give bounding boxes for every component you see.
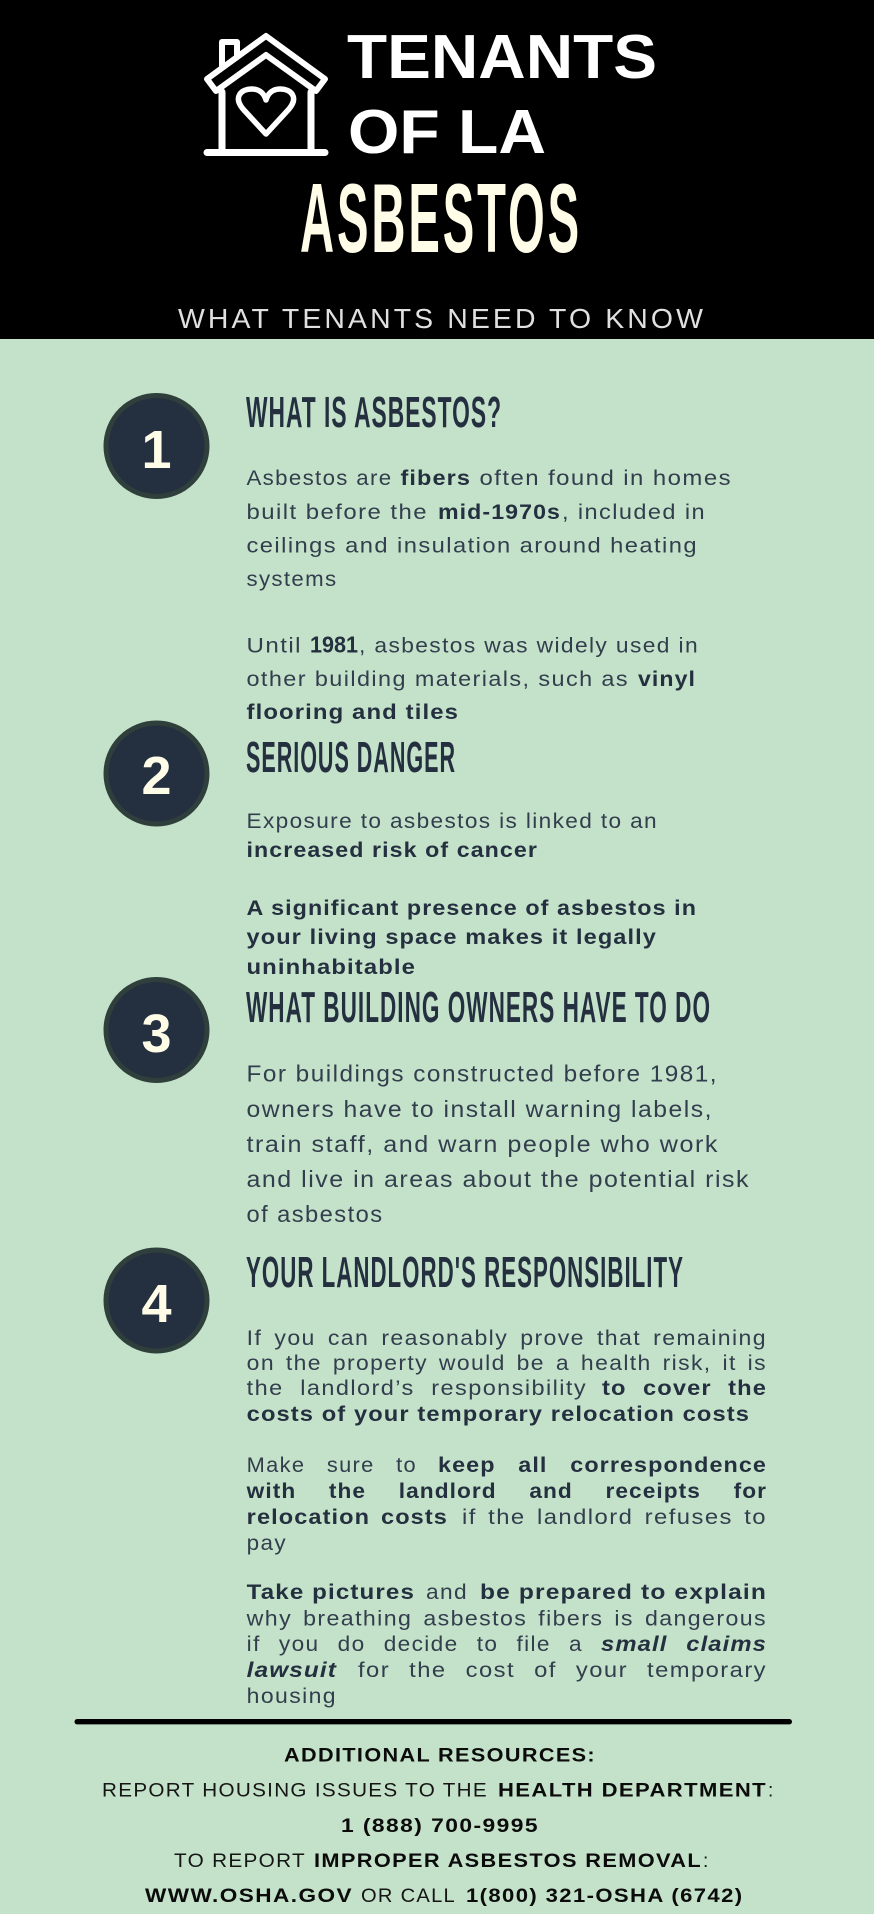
OSHA contact line: 1(800) 321-OSHA (6742): [466, 1886, 744, 1907]
asbestos removal line: IMPROPER ASBESTOS REMOVAL: [314, 1851, 702, 1872]
text block: section 2 body: uninhabitable: [246, 955, 416, 979]
text block: section 4 body: pay: [247, 1531, 287, 1555]
text block: section 4 body: if the landlord refuses to: [462, 1505, 767, 1529]
text block: section 4 body: lawsuit: [247, 1658, 337, 1682]
asbestos removal line: :: [703, 1851, 709, 1872]
text block: section 1 body: , included in: [562, 500, 706, 524]
text block: section 4 body: small claims: [601, 1632, 767, 1656]
logo text: Tenants of LA: [347, 23, 657, 167]
text block: section 1 body: vinyl: [638, 667, 696, 691]
text block: section 2 body: A significant presence of asbestos in: [246, 896, 697, 920]
panel: section 2 serious danger: SERIOUS DANGER: [246, 733, 456, 782]
text block: section 1 body: flooring and tiles: [246, 700, 459, 724]
text block: section 4 body: If you can reasonably prove that remaining: [247, 1326, 767, 1350]
panel: black header: [0, 0, 874, 339]
panel: section 1 what is asbestos: [106, 388, 732, 724]
text block: section 3 body: For buildings constructed before 1981,: [246, 1061, 718, 1087]
OSHA contact line: WWW.OSHA.GOV: [145, 1886, 353, 1907]
text block: section 4 body: be prepared to explain: [480, 1580, 767, 1604]
text block: section 3 body: of asbestos: [246, 1201, 384, 1227]
text block: section 1 body: fibers: [400, 466, 471, 490]
text block: section 3 body: [246, 1061, 750, 1227]
number badge 4: [106, 1250, 207, 1351]
OSHA contact line: [145, 1886, 744, 1907]
number badge 1: [106, 396, 207, 496]
panel: section 4 your landlord's responsibility: [106, 1248, 767, 1708]
number badge 2: 2: [141, 746, 172, 806]
text block: section 4 body: costs of your temporary relocation costs: [247, 1402, 750, 1426]
asbestos removal line: TO REPORT: [174, 1851, 306, 1872]
text block: section 4 body: keep all correspondence: [438, 1453, 767, 1477]
logo text: Tenants of LA: OF LA: [348, 98, 546, 167]
text block: section 4 body: the landlord’s responsibility: [247, 1376, 587, 1400]
text block: section 1 body: Until: [246, 634, 302, 658]
text block: section 3 body: owners have to install warning labels,: [246, 1096, 713, 1122]
number badge 1: 1: [141, 420, 172, 480]
panel: black header: ASBESTOS: [300, 163, 582, 273]
panel: section 2 serious danger: [106, 723, 697, 979]
text block: section 1 body: Asbestos are: [246, 466, 392, 490]
number badge 3: 3: [141, 1004, 172, 1064]
text block: section 4 body: if you do decide to file a: [247, 1632, 583, 1656]
icon: house with heart: [207, 36, 325, 152]
health department line: :: [768, 1781, 774, 1802]
health department phone: 1 (888) 700-9995: [341, 1816, 539, 1837]
footer heading: ADDITIONAL RESOURCES:: [284, 1746, 596, 1767]
asbestos removal line: [174, 1851, 709, 1872]
text block: section 4 body: Take pictures: [247, 1580, 415, 1604]
text block: section 1 body: other building materials, such as: [246, 667, 629, 691]
logo text: Tenants of LA: TENANTS: [347, 23, 657, 92]
text block: section 4 body: for the cost of your temporary: [358, 1658, 767, 1682]
text block: section 1 body: mid-1970s: [438, 500, 561, 524]
number badge 2: [106, 723, 207, 824]
health department line: [102, 1781, 774, 1802]
text block: section 1 body: ceilings and insulation around heating: [246, 534, 698, 558]
subtitle: WHAT TENANTS NEED TO KNOW: [178, 303, 706, 334]
text block: section 1 body: systems: [246, 567, 338, 591]
text block: section 4 body: relocation costs: [247, 1505, 448, 1529]
text block: section 4 body: Make sure to: [247, 1453, 417, 1477]
health department line: REPORT HOUSING ISSUES TO THE: [102, 1781, 488, 1802]
heading: what is asbestos: WHAT IS ASBESTOS?: [246, 388, 502, 437]
text block: section 4 body: [246, 1326, 767, 1708]
text block: section 2 body: increased risk of cancer: [246, 838, 538, 862]
text block: section 2 body: [246, 809, 697, 979]
panel: section 3 what building owners have to do: [106, 980, 750, 1227]
text block: section 1 body: often found in homes: [480, 466, 732, 490]
text block: section 3 body: and live in areas about the potential risk: [246, 1166, 750, 1192]
text block: section 4 body: and: [426, 1580, 468, 1604]
text block: section 4 body: with the landlord and receipts for: [246, 1479, 767, 1503]
text block: section 4 body: to cover the: [602, 1376, 767, 1400]
panel: additional resources footer: [102, 1746, 774, 1907]
text block: section 1 body: built before the: [246, 500, 428, 524]
number badge 4: 4: [141, 1274, 172, 1334]
number badge 3: [106, 980, 207, 1080]
text block: section 1 body: [246, 466, 732, 724]
text block: section 2 body: Exposure to asbestos is linked to an: [246, 809, 658, 833]
text block: section 3 body: train staff, and warn people who work: [246, 1131, 719, 1157]
OSHA contact line: OR CALL: [361, 1886, 456, 1907]
text block: section 1 body: , asbestos was widely used in: [359, 634, 699, 658]
text block: section 1 body: 1981: [310, 632, 358, 658]
text block: section 4 body: housing: [247, 1684, 337, 1708]
text block: section 4 body: on the property would be a health risk, it is: [247, 1351, 767, 1375]
text block: section 4 body: why breathing asbestos fibers is dangerous: [246, 1607, 767, 1631]
text block: section 2 body: your living space makes it legally: [246, 925, 657, 949]
health department line: HEALTH DEPARTMENT: [498, 1781, 767, 1802]
